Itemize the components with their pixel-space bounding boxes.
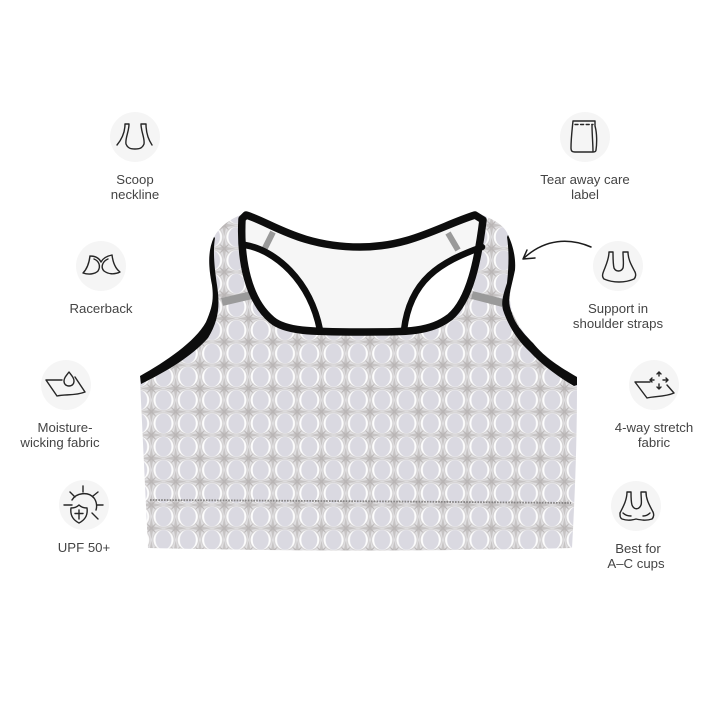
feature: tear away care label: [540, 112, 630, 202]
arrow pointing to strap: [523, 241, 591, 259]
black trim: left armhole: [140, 237, 218, 384]
icon: care label: [560, 112, 610, 162]
label: scoop neckline: Scoop: [116, 172, 154, 187]
label: best for A–C cups: Best for: [615, 541, 661, 556]
label: 4-way stretch fabric: 4-way stretch: [615, 420, 693, 435]
icon: sun with shield: [59, 480, 109, 530]
icon: stretch fabric: [629, 360, 679, 410]
label: support in shoulder straps: shoulder straps: [573, 316, 663, 331]
label: moisture-wicking fabric: Moisture-: [38, 420, 92, 435]
bra garment: [140, 214, 577, 550]
black trim: racerback straps: [245, 245, 482, 330]
black trim: neckline and back loop: [242, 215, 483, 332]
label: 4-way stretch fabric: fabric: [638, 435, 671, 450]
inner back panel: [242, 215, 483, 332]
feature: UPF 50+: [58, 480, 110, 555]
label: scoop neckline: neckline: [111, 187, 159, 202]
gray elastic strips: [222, 232, 503, 303]
label: best for A–C cups: A–C cups: [607, 556, 665, 571]
hem seam: [150, 500, 571, 503]
racerback cut-out right: [404, 247, 482, 330]
icon: moisture-wicking fabric: [41, 360, 91, 410]
feature: racerback: [69, 241, 133, 316]
black trim: right armhole: [502, 235, 577, 386]
label: tear away care label: label: [571, 187, 599, 202]
feature: scoop neckline: [110, 112, 160, 202]
icon: racerback: [76, 241, 126, 291]
label: UPF 50+: UPF 50+: [58, 540, 110, 555]
feature: moisture-wicking fabric: [19, 360, 100, 450]
label: support in shoulder straps: Support in: [588, 301, 648, 316]
racerback cut-out left: [245, 245, 320, 330]
label: tear away care label: Tear away care: [540, 172, 630, 187]
icon: cups: [611, 481, 661, 531]
label: moisture-wicking fabric: wicking fabric: [19, 435, 100, 450]
printed fabric body: [140, 214, 577, 550]
feature: 4-way stretch fabric: [615, 360, 693, 450]
feature: best for A–C cups: [607, 481, 665, 571]
label: racerback: Racerback: [69, 301, 133, 316]
icon: scoop neckline: [110, 112, 160, 162]
feature: support in shoulder straps: [523, 241, 663, 331]
icon: bra top: [593, 241, 643, 291]
